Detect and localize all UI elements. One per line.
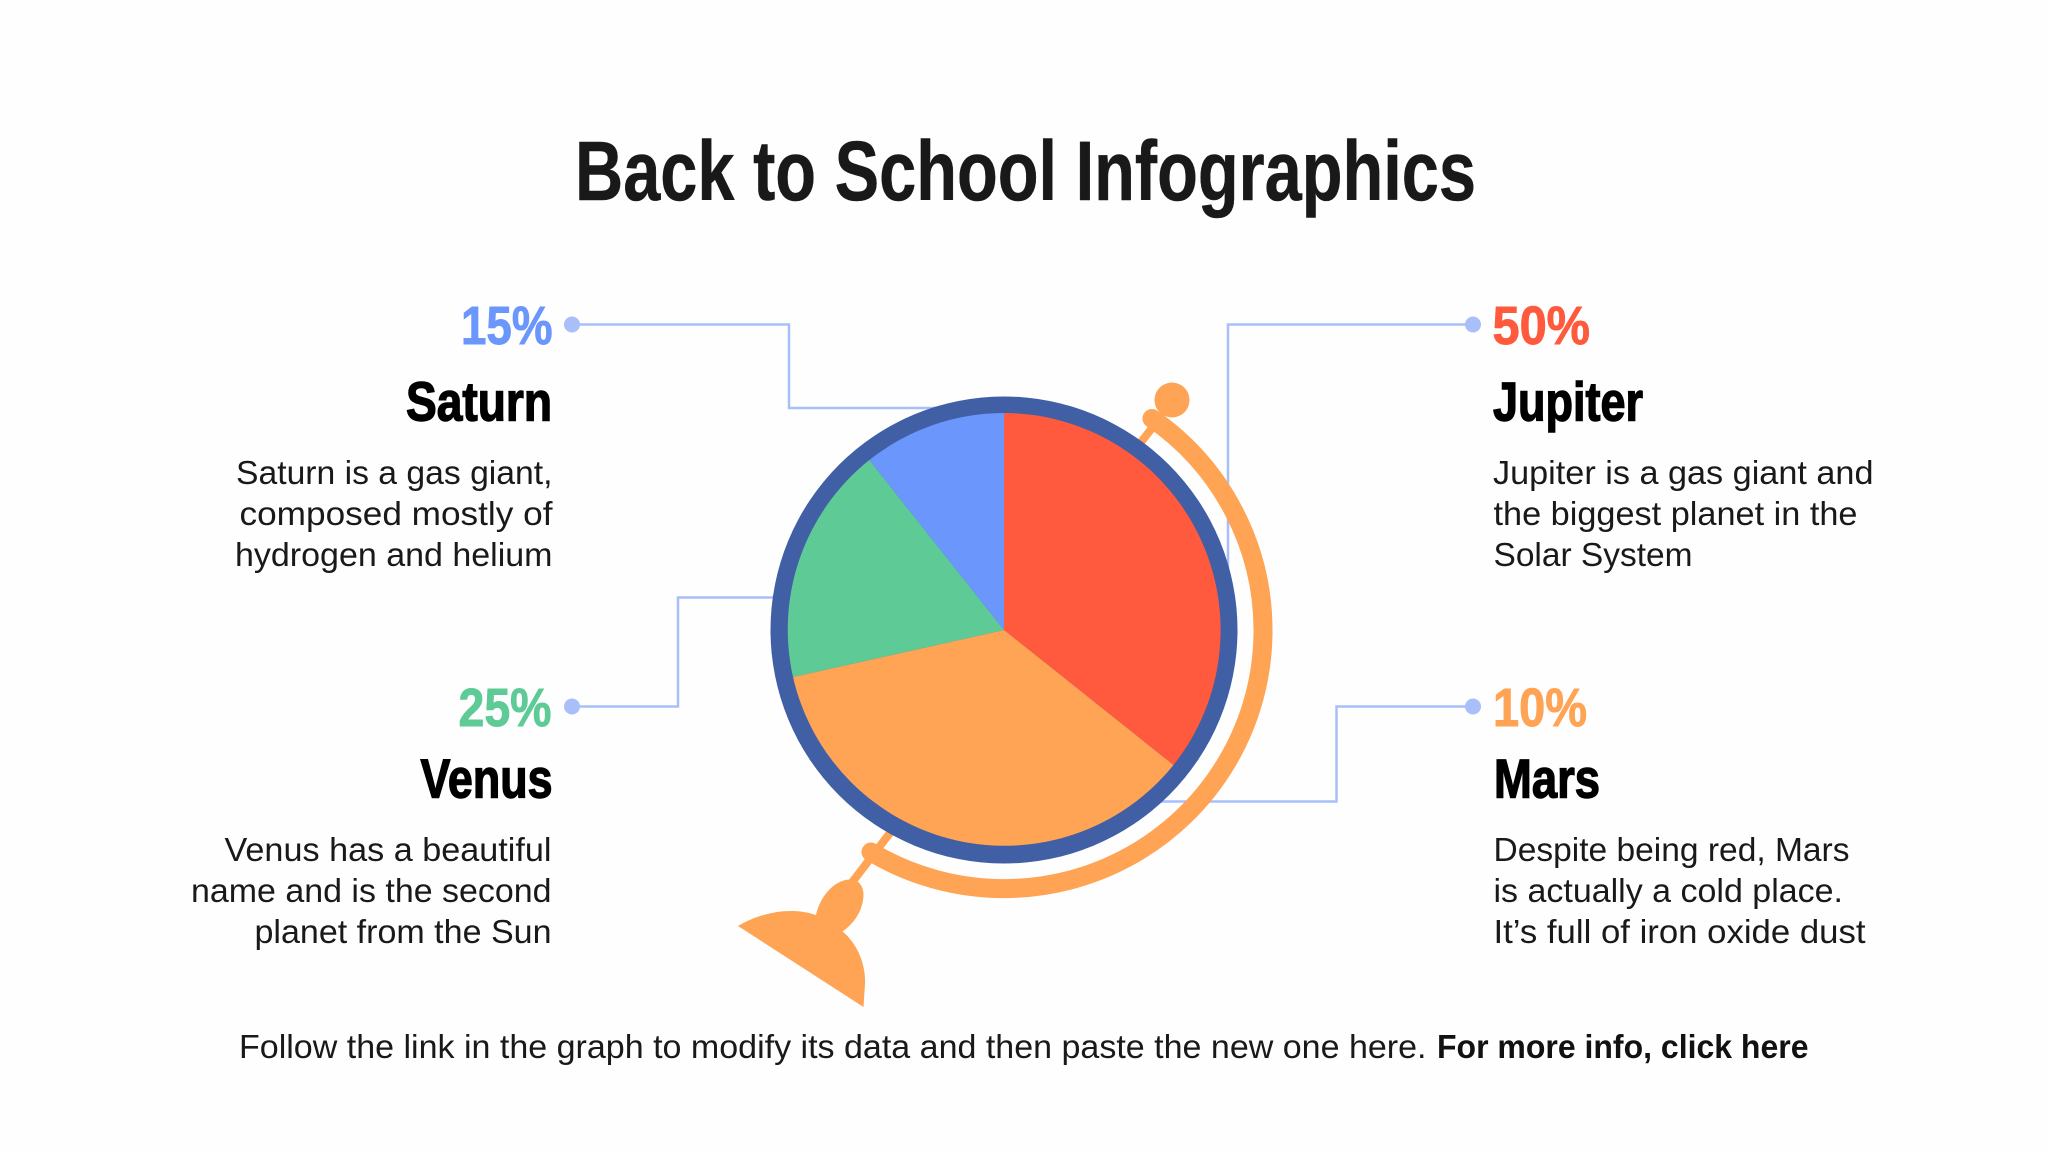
planet name: Mars: [1494, 748, 1600, 810]
description: composed mostly of: [240, 495, 553, 532]
planet name: Jupiter: [1493, 370, 1643, 432]
percentage: 15%: [461, 296, 552, 356]
globe pie chart: [738, 382, 1263, 1007]
connector: Mars: [1140, 698, 1481, 802]
description: [1493, 454, 1874, 573]
percentage: 25%: [458, 678, 552, 738]
description: Despite being red, Mars: [1494, 831, 1850, 868]
block: Saturn: [235, 296, 553, 573]
connector: Jupiter: [1228, 316, 1481, 570]
description: hydrogen and helium: [235, 536, 552, 573]
description: name and is the second: [191, 872, 552, 909]
description: It’s full of iron oxide dust: [1494, 913, 1866, 950]
description: the biggest planet in the: [1494, 495, 1858, 532]
description: Saturn is a gas giant,: [236, 454, 552, 491]
top knob: [1154, 382, 1190, 418]
block: Jupiter: [1492, 296, 1874, 573]
description: planet from the Sun: [254, 913, 552, 950]
slice: Mars: [793, 630, 1174, 846]
description: Venus has a beautiful: [224, 831, 552, 868]
description: Jupiter is a gas giant and: [1493, 454, 1874, 491]
description: [1494, 831, 1866, 950]
connector: Saturn: [564, 316, 960, 408]
globe stand: [738, 382, 1263, 1007]
connector: Venus: [564, 598, 790, 714]
planet name: Saturn: [406, 370, 552, 432]
description: [235, 454, 553, 573]
description: Solar System: [1494, 536, 1692, 573]
percentage: 10%: [1493, 678, 1587, 738]
globe ring: [770, 396, 1238, 864]
block: Mars: [1493, 678, 1866, 950]
slice: Venus: [788, 460, 1004, 677]
percentage: 50%: [1492, 296, 1590, 356]
base: [738, 879, 865, 1007]
slice: Jupiter: [1004, 413, 1221, 765]
slice: Saturn: [869, 413, 1004, 630]
axis pin: top: [1135, 428, 1152, 450]
block: Venus: [191, 678, 552, 950]
title: Back to School Infographics: [575, 124, 1476, 218]
footer note: Follow the link in the graph to modify its data and then paste the new one here.: [239, 1028, 1426, 1065]
description: is actually a cold place.: [1494, 872, 1843, 909]
meridian arc: [871, 418, 1263, 889]
axis pin: bottom: [850, 833, 890, 885]
description: [191, 831, 552, 950]
planet name: Venus: [420, 748, 552, 810]
footer note: For more info, click here: [1437, 1028, 1808, 1065]
